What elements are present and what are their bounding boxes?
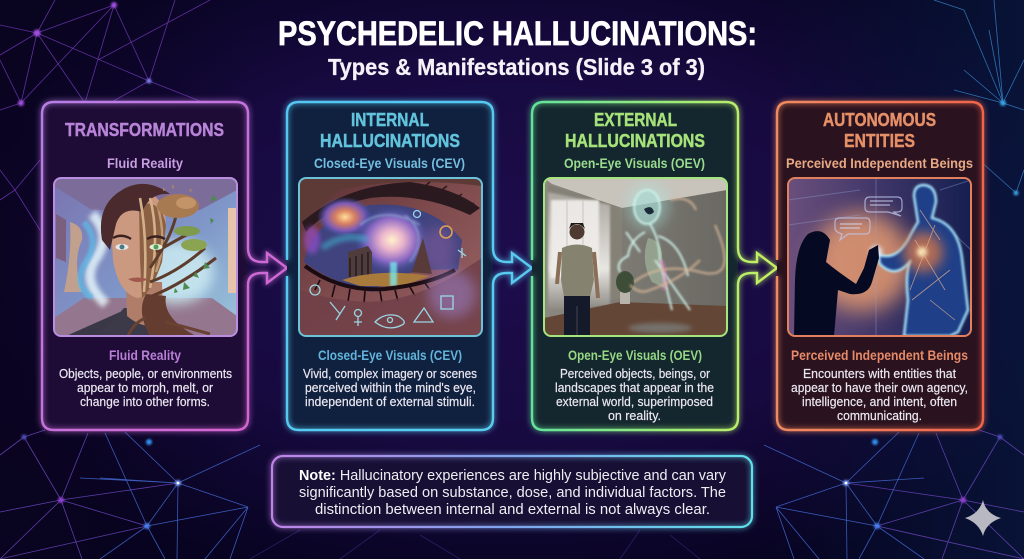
- illustration: man and translucent alien in room: [544, 178, 727, 340]
- description: [303, 366, 477, 409]
- note text: [299, 467, 726, 518]
- panel: internal hallucinations: [287, 102, 532, 430]
- description: Objects, people, or environments: [59, 366, 232, 381]
- callout: note: [272, 456, 752, 527]
- heading: AUTONOMOUS: [823, 110, 936, 130]
- illustration: face turning into tree: [54, 178, 237, 336]
- description: perceived within the mind's eye,: [305, 380, 476, 395]
- heading: TRANSFORMATIONS: [65, 120, 224, 140]
- heading: INTERNAL: [351, 110, 429, 130]
- note text: significantly based on substance, dose, and individual factors. The: [299, 484, 726, 501]
- heading: [565, 110, 705, 151]
- subtitle: Types & Manifestations (Slide 3 of 3): [328, 54, 705, 80]
- illustration: silhouette touching holographic being: [788, 178, 971, 336]
- heading: HALLUCINATIONS: [565, 131, 705, 151]
- description: landscapes that appear in the: [555, 380, 714, 395]
- note text: distinction between internal and external is not always clear.: [315, 501, 710, 518]
- network lines and nodes right: [764, 0, 1024, 559]
- subheading: Closed-Eye Visuals (CEV): [314, 155, 465, 171]
- heading: ENTITIES: [844, 131, 915, 151]
- note text: Note: Hallucinatory experiences are highly subjective and can vary: [299, 467, 726, 484]
- subheading: Perceived Independent Beings: [786, 155, 973, 171]
- panel: external hallucinations: [532, 102, 777, 430]
- heading: [823, 110, 936, 151]
- description: [791, 366, 968, 423]
- panel border: autonomous: [777, 102, 983, 430]
- panel border and arrow: transformations: [42, 102, 287, 430]
- network lines left: [0, 0, 700, 559]
- lower subheading: Fluid Reality: [109, 347, 181, 363]
- description: Vivid, complex imagery or scenes: [303, 366, 477, 381]
- title: PSYCHEDELIC HALLUCINATIONS:: [278, 15, 757, 53]
- network nodes left: [18, 2, 181, 529]
- description: communicating.: [837, 408, 922, 423]
- description: independent of external stimuli.: [305, 394, 475, 409]
- description: external world, superimposed: [556, 394, 713, 409]
- heading: HALLUCINATIONS: [320, 131, 460, 151]
- description: on reality.: [608, 408, 661, 423]
- description: appear to morph, melt, or: [77, 380, 214, 395]
- description: Encounters with entities that: [803, 366, 956, 381]
- description: intelligence, and intent, often: [802, 394, 957, 409]
- panel: transformations: [42, 102, 287, 430]
- subheading: Fluid Reality: [107, 155, 183, 171]
- heading: EXTERNAL: [594, 110, 677, 130]
- lower subheading: Open-Eye Visuals (OEV): [568, 347, 702, 363]
- subheading: Open-Eye Visuals (OEV): [564, 155, 705, 171]
- lower subheading: Perceived Independent Beings: [791, 347, 968, 363]
- panel border and arrow: internal: [287, 102, 532, 430]
- description: change into other forms.: [80, 394, 210, 409]
- panel border and arrow: external: [532, 102, 777, 430]
- panel: autonomous entities: [777, 102, 983, 430]
- description: Perceived objects, beings, or: [560, 366, 711, 381]
- description: [555, 366, 714, 423]
- description: appear to have their own agency,: [791, 380, 968, 395]
- lower subheading: Closed-Eye Visuals (CEV): [318, 347, 462, 363]
- icon: sparkle watermark: [965, 500, 1001, 536]
- heading: [320, 110, 460, 151]
- description: [59, 366, 232, 409]
- illustration: closed eye with galaxies: [299, 178, 482, 336]
